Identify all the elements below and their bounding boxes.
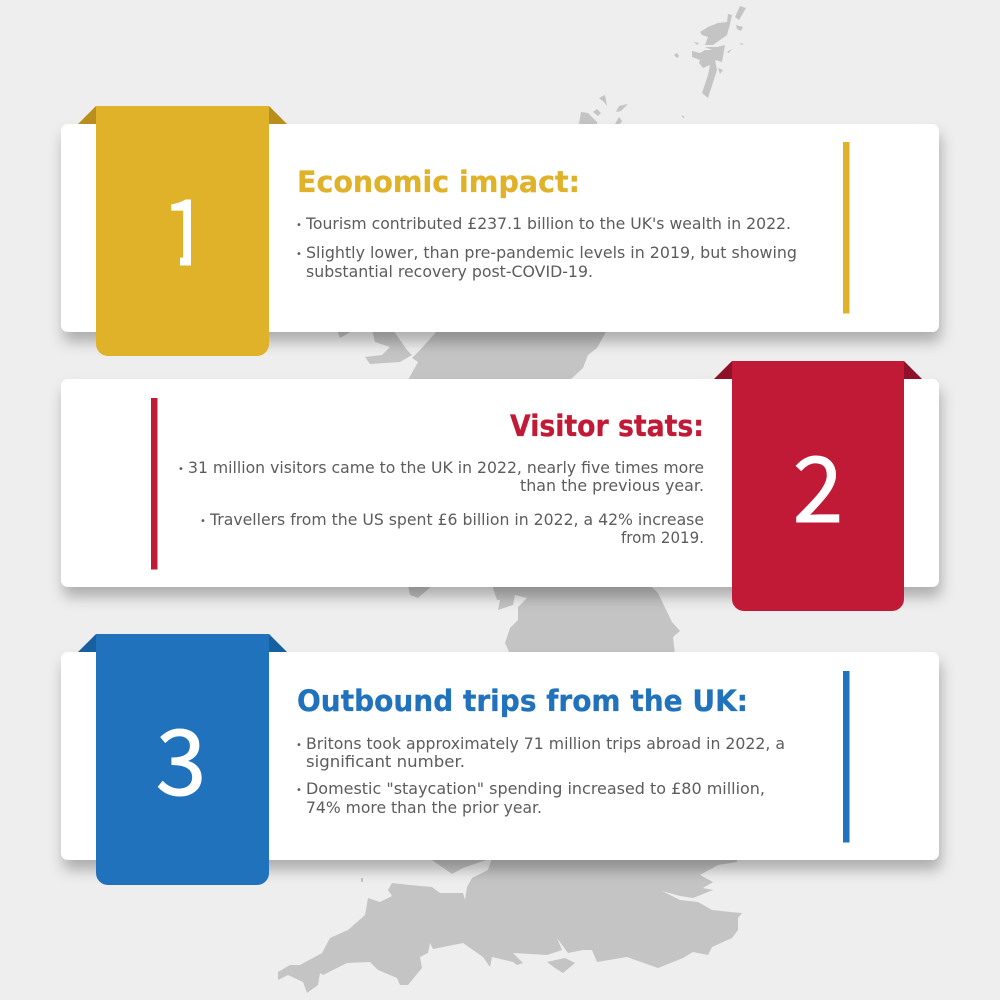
bullet text: substantial recovery post-COVID-19. — [306, 262, 593, 281]
bullet text: 31 million visitors came to the UK in 2022, nearly five times more — [188, 458, 704, 477]
card background — [61, 652, 939, 860]
heading: Outbound trips from the UK: — [297, 684, 748, 718]
bullet text: • — [296, 220, 302, 231]
card background — [61, 124, 939, 332]
bullet text: Britons took approximately 71 million trips abroad in 2022, a — [306, 734, 785, 753]
bullet text — [296, 734, 785, 817]
bullet text: • — [296, 249, 302, 260]
Northern England and Wales coast — [408, 585, 680, 654]
ribbon fold — [714, 361, 922, 379]
heading: Economic impact: — [297, 165, 580, 199]
bullet text: • — [178, 464, 184, 475]
Orkney islands — [579, 95, 628, 124]
bullet text: • — [296, 740, 302, 751]
bullet text: 74% more than the prior year. — [306, 798, 542, 817]
Scotland — [337, 330, 607, 380]
ribbon — [96, 634, 269, 885]
accent bar — [843, 671, 850, 842]
bullet text: Domestic "staycation" spending increased to £80 million, — [306, 779, 765, 798]
number 3: 3 — [156, 690, 206, 822]
ribbon — [96, 106, 269, 356]
bullet text: from 2019. — [621, 528, 704, 547]
Shetland islands — [674, 6, 746, 118]
bullet text: • — [296, 785, 302, 796]
ribbon fold — [78, 634, 287, 652]
accent bar — [151, 398, 158, 570]
panel: visitor stats — [61, 361, 939, 611]
bullet text — [178, 458, 704, 547]
map of Great Britain — [278, 6, 746, 993]
Southern England — [278, 858, 742, 993]
number 2: 2 — [793, 417, 843, 549]
bullet text: significant number. — [306, 752, 465, 771]
card background — [61, 379, 939, 587]
bullet text — [296, 214, 797, 281]
bullet text: Travellers from the US spent £6 billion in 2022, a 42% increase — [209, 510, 704, 529]
heading: Visitor stats: — [510, 409, 704, 443]
bullet text: Tourism contributed £237.1 billion to the UK's wealth in 2022. — [305, 214, 791, 233]
bullet text: than the previous year. — [520, 476, 704, 495]
number 1: 1 — [161, 160, 211, 292]
bullet text: • — [200, 516, 206, 527]
ribbon fold — [78, 106, 287, 124]
accent bar — [843, 142, 850, 314]
panel: economic impact — [61, 106, 939, 356]
panel: outbound trips — [61, 634, 939, 885]
ribbon — [732, 361, 904, 611]
bullet text: Slightly lower, than pre-pandemic levels in 2019, but showing — [306, 243, 797, 262]
